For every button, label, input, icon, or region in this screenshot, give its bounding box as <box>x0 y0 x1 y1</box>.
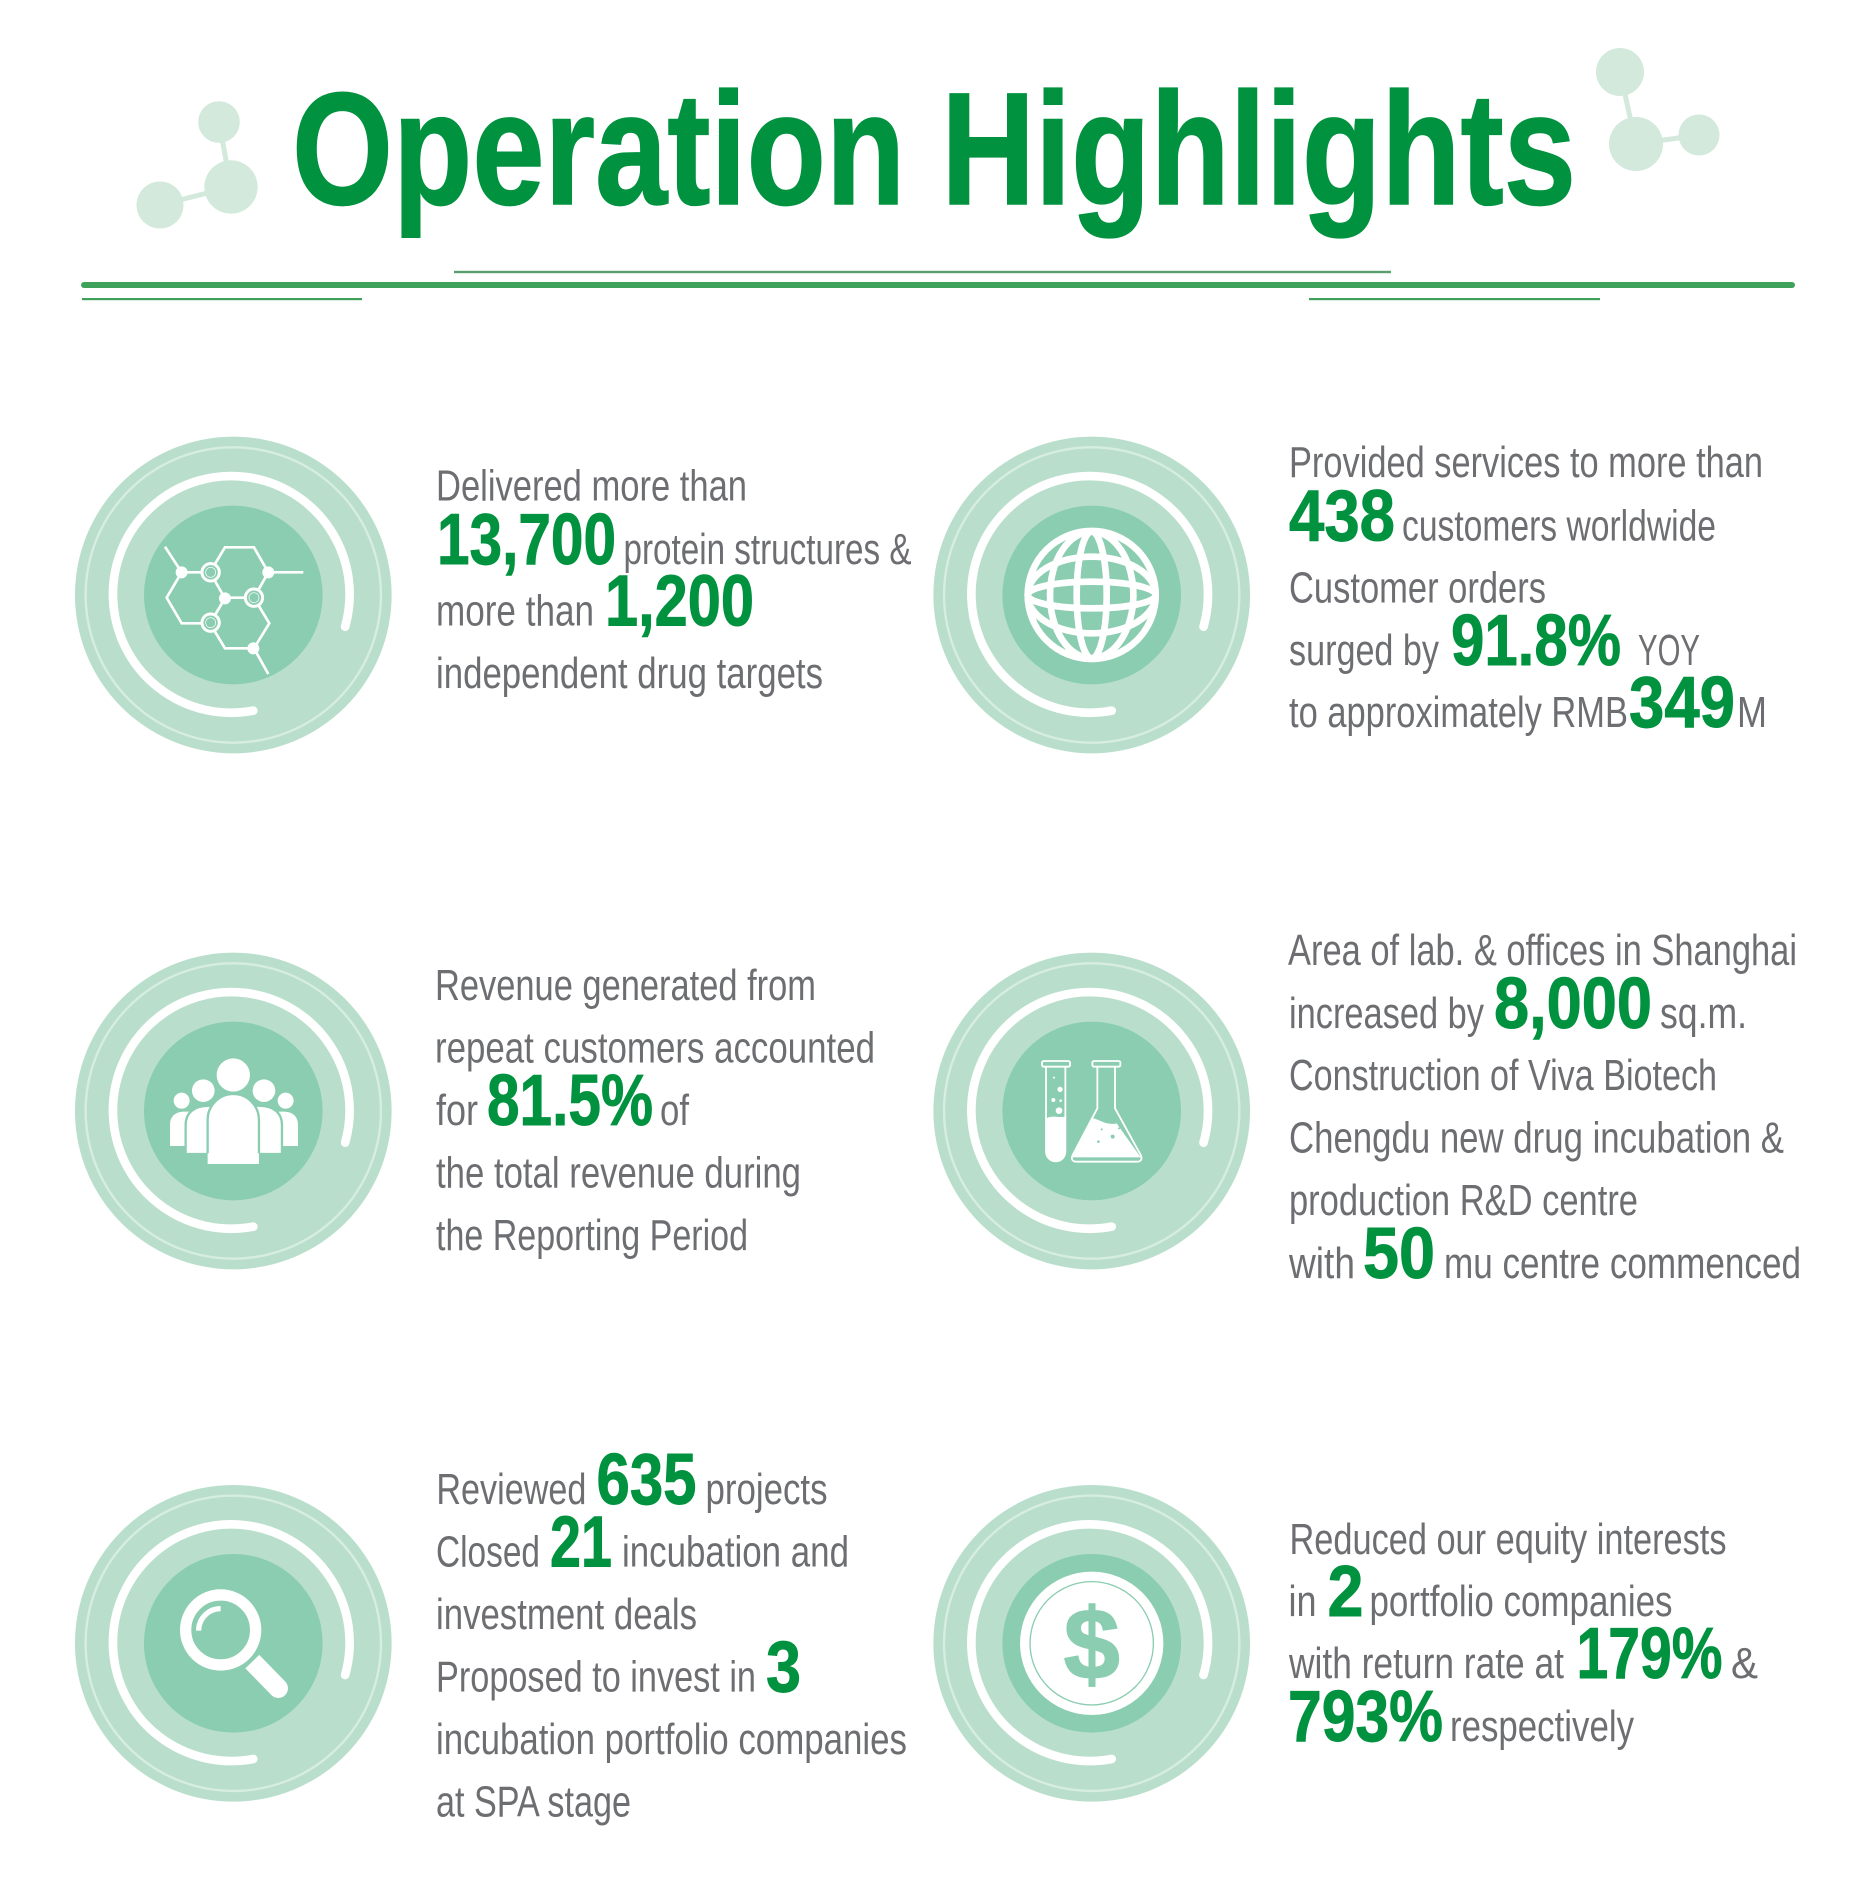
text block: customers and orders: Customer orders <box>1289 565 1546 613</box>
text block: repeat customer revenue: of <box>660 1087 690 1135</box>
text block: equity interests: 2 <box>1328 1552 1364 1632</box>
text block: lab area and Chengdu centre: increased by <box>1289 990 1484 1038</box>
icon: right header molecule <box>1596 48 1720 171</box>
icon: group of people <box>170 1058 298 1164</box>
text block: equity interests: with return rate at <box>1288 1640 1564 1688</box>
text block: projects and deals: 3 <box>766 1628 801 1708</box>
text block: protein structures: more than <box>436 587 594 635</box>
text block: projects and deals: incubation and <box>622 1529 849 1577</box>
text block: repeat customer revenue: Revenue generated from <box>435 962 816 1010</box>
text block: customers and orders: 438 <box>1289 477 1395 557</box>
text block: equity interests: Reduced our equity interests <box>1290 1516 1726 1564</box>
text block: protein structures: Delivered more than <box>436 463 747 511</box>
text block: projects and deals: Closed <box>436 1529 540 1577</box>
text block: projects and deals: Proposed to invest in <box>436 1654 756 1702</box>
text block: protein structures: 13,700 <box>437 500 616 580</box>
text block: equity interests: respectively <box>1450 1703 1634 1751</box>
text block: repeat customer revenue: repeat customers accounted <box>435 1025 875 1073</box>
text block: projects and deals: 635 <box>596 1440 696 1520</box>
text block: lab area and Chengdu centre <box>1288 927 1801 1294</box>
text block: protein structures: 1,200 <box>605 561 754 641</box>
icon: dollar coin <box>1020 1572 1163 1715</box>
text block: projects and deals: investment deals <box>436 1591 697 1639</box>
panel: project review icon <box>75 1485 392 1802</box>
text block: repeat customer revenue: for <box>436 1087 478 1135</box>
text block: equity interests: in <box>1288 1578 1316 1626</box>
text block: repeat customer revenue: the Reporting Period <box>436 1212 748 1260</box>
text block: projects and deals: Reviewed <box>436 1466 586 1514</box>
panel: laboratory icon <box>933 953 1250 1269</box>
panel: returns icon <box>933 1485 1250 1802</box>
text block: equity interests: & <box>1731 1640 1758 1688</box>
text block: equity interests: 793% <box>1288 1677 1443 1757</box>
text block: projects and deals: 21 <box>550 1503 612 1583</box>
text block: customers and orders: 91.8% <box>1451 601 1621 681</box>
icon: left header molecule <box>136 101 258 228</box>
text block: repeat customer revenue <box>435 962 875 1260</box>
panel: protein structures icon <box>75 437 392 753</box>
text block: projects and deals: projects <box>706 1466 828 1514</box>
text block: customers and orders: surged by <box>1289 627 1439 675</box>
text block: protein structures: protein structures & <box>624 526 912 574</box>
text block: customers and orders: 349 <box>1629 663 1735 743</box>
text block: lab area and Chengdu centre: 50 <box>1363 1214 1435 1294</box>
panel: repeat customers icon <box>75 953 392 1269</box>
text block: customers and orders: M <box>1737 689 1767 737</box>
icon: hexagon molecule <box>165 547 303 674</box>
text block: protein structures: independent drug targets <box>436 650 823 698</box>
text block: protein structures <box>436 463 912 698</box>
text block: lab area and Chengdu centre: sq.m. <box>1660 990 1747 1038</box>
title: Operation Highlights <box>292 59 1576 238</box>
text block: customers and orders: to approximately RMB <box>1289 689 1628 737</box>
text block: customers and orders: YOY <box>1638 627 1700 675</box>
text block: equity interests: portfolio companies <box>1370 1578 1672 1626</box>
text block: projects and deals: incubation portfolio companies <box>436 1716 907 1764</box>
text block: projects and deals <box>436 1440 907 1827</box>
text block: lab area and Chengdu centre: with <box>1288 1240 1355 1288</box>
text block: projects and deals: at SPA stage <box>436 1779 631 1827</box>
text block: lab area and Chengdu centre: mu centre commenced <box>1444 1240 1801 1288</box>
icon: test tube and flask <box>1042 1061 1141 1162</box>
text block: equity interests <box>1288 1516 1758 1757</box>
text block: customers and orders: customers worldwide <box>1402 503 1716 551</box>
text block: repeat customer revenue: 81.5% <box>487 1061 653 1141</box>
icon: dollar coin: $ <box>1064 1588 1120 1700</box>
panel: customers worldwide icon <box>933 437 1250 753</box>
text block: lab area and Chengdu centre: 8,000 <box>1494 964 1652 1044</box>
text block: equity interests: 179% <box>1576 1614 1722 1694</box>
icon: magnifying glass <box>186 1595 288 1698</box>
text block: customers and orders <box>1289 439 1767 743</box>
text block: customers and orders: Provided services to more than <box>1289 439 1763 487</box>
icon: globe <box>1028 531 1156 659</box>
text block: lab area and Chengdu centre: production R&D centre <box>1289 1177 1638 1225</box>
header rule lines <box>81 271 1795 300</box>
text block: lab area and Chengdu centre: Construction of Viva Biotech <box>1289 1052 1717 1100</box>
text block: repeat customer revenue: the total revenue during <box>436 1149 801 1197</box>
